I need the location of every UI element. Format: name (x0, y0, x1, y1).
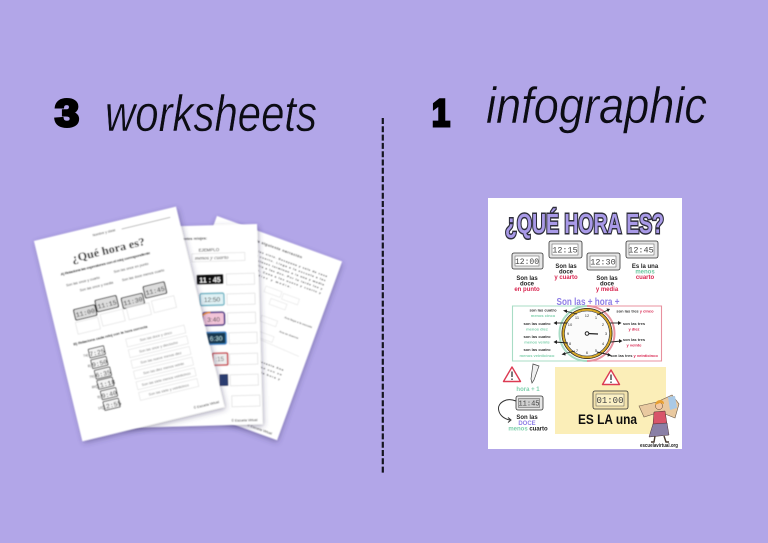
caption: son las doce menos cuarto: Son las (516, 415, 538, 421)
worksheet 3: reading page (back): juega hasta las seis. Cena a las nueve y cuarto y (216, 253, 322, 295)
worksheet 2: digital clocks page (middle): menos y cuarto (195, 255, 229, 262)
worksheet 1: ¿Qué hora es? page (front): 9:50 (91, 359, 108, 369)
yellow panel: es la una (555, 367, 666, 434)
infographic poster (488, 198, 682, 449)
worksheet 3: reading page (back): dibújala. (221, 362, 251, 376)
caption: son las doce menos cuarto: menos cuarto (508, 426, 548, 432)
worksheet 1: ¿Qué hora es? page (front): 11:00 (75, 308, 96, 319)
answer boxes row (75, 296, 177, 334)
worksheet 3: reading page (back): y come con su familia a las dos. Por la tarde lee y (218, 249, 323, 291)
worksheet 1: ¿Qué hora es? page (front): 7b) (89, 374, 95, 379)
worksheet 2: digital clocks page (middle): © Escuela Virtual (231, 418, 258, 423)
clock captions: cuarto (636, 275, 654, 281)
left labels: son las cuatro (529, 308, 557, 312)
worksheet 2: digital clocks page (middle) (116, 224, 263, 428)
worksheet 1: ¿Qué hora es? page (front): Son las nueve menos diez (140, 351, 182, 365)
worksheet 3: reading page (back): y a qué hora come con su (225, 352, 282, 377)
worksheet 1: ¿Qué hora es? page (front) (34, 207, 224, 441)
worksheet 1: ¿Qué hora es? page (front): © Escuela Virtual (193, 400, 220, 410)
analog clock: 3 (605, 331, 608, 336)
worksheet 3: reading page (back): ¿A qué hora se levanta Ana (226, 348, 284, 372)
left labels: son las cuatro (523, 334, 551, 339)
worksheet 2: digital clocks page (middle): 11 : 45 (199, 277, 221, 285)
analog clock (559, 306, 614, 361)
curved arrow (498, 400, 516, 422)
right labels: y diez (628, 326, 640, 332)
worksheet title: ¿Qué hora es? (70, 234, 146, 265)
clock captions: Son las (516, 276, 538, 282)
analog clock: 1 (595, 315, 598, 320)
caption: son las doce menos cuarto (508, 415, 548, 432)
left labels: menos veinticinco (520, 353, 555, 358)
yellow panel: es la una: 01:00 (596, 396, 624, 406)
dashed divider (382, 118, 384, 473)
left labels: son las cuatro (523, 321, 551, 326)
clock captions: doce (559, 270, 574, 276)
worksheet 1: ¿Qué hora es? page (front): 9:40 (101, 390, 118, 400)
clock captions: en punto (514, 287, 540, 293)
worksheet 2: digital clocks page (middle): 6:30 (210, 336, 223, 343)
clock 12:45 (626, 241, 658, 258)
worksheet 1: ¿Qué hora es? page (front): 9) (97, 395, 101, 399)
worksheet 2: digital clocks page (middle): :15 (215, 357, 225, 363)
clock captions: doce (600, 282, 615, 288)
worksheet 1: ¿Qué hora es? page (front): 11:15 (97, 299, 118, 311)
clock 12:15: 12:15 (552, 246, 578, 256)
worksheet 1: ¿Qué hora es? page (front): Nombre y clase (92, 228, 116, 238)
worksheet 1: ¿Qué hora es? page (front): 8) (87, 364, 91, 368)
character holding a map (639, 395, 679, 442)
clock captions: Son las (596, 276, 618, 282)
analog clock: 5 (595, 348, 598, 353)
number 1: 1 (432, 93, 450, 135)
analog clock: 2 (602, 322, 605, 327)
analog clock: 11 (575, 315, 580, 320)
clock 11:45 (516, 396, 543, 410)
right labels: son las tres (623, 337, 646, 342)
expressions: Son las once en punto (113, 262, 149, 274)
clock diagram panel (512, 306, 662, 361)
left labels: menos cinco (531, 313, 556, 318)
worksheet 3: reading page (back): © Escuela Virtual (247, 423, 273, 436)
worksheet 1: ¿Qué hora es? page (front): 11:45 (145, 286, 166, 297)
clock captions: doce (520, 282, 535, 288)
worksheet 3: reading page (back): a las ocho menos cuarto. Llega a la escuela a las (221, 241, 326, 282)
worksheet 1: ¿Qué hora es? page (front): 11:30 (123, 296, 143, 308)
number 3: 3 (55, 93, 79, 135)
clock 12:45: 12:45 (628, 246, 654, 256)
worksheet 2: digital clocks page (middle): diferentes relojes: (174, 236, 207, 241)
hora + 1 label: hora + 1 (516, 387, 540, 393)
subheading: Son las + hora + (556, 297, 620, 308)
heading: 3 worksheets (55, 85, 317, 142)
worksheet 3: reading page (back): Ana llega a la escuela (284, 315, 313, 329)
answer boxes (226, 273, 260, 407)
word infographic: infographic (486, 77, 707, 134)
worksheet 1: ¿Qué hora es? page (front): 12:55 (102, 400, 122, 411)
worksheet 3: reading page (back): Ana se duerme (279, 329, 299, 340)
coloured clocks (196, 274, 224, 285)
worksheet 1: ¿Qué hora es? page (front): 8b) (91, 384, 97, 389)
analog clock: 9 (567, 331, 570, 336)
clock 12:30: 12:30 (590, 258, 616, 268)
clock 12:30 (587, 253, 620, 270)
clock 01:00 (593, 391, 628, 409)
worksheet 1: ¿Qué hora es? page (front): Son las doce y cinco (139, 331, 172, 342)
right labels: son las tres y cinco (616, 308, 654, 314)
worksheet 3: reading page (back) (152, 216, 342, 440)
poster title: ¿QUÉ HORA ES? (505, 208, 664, 239)
clock captions: Son las (555, 264, 577, 270)
worksheet 1: ¿Qué hora es? page (front): Son las siete menos veinticinco (141, 371, 191, 387)
section B heading: B) Relaciona cada reloj con la hora correcta (73, 324, 149, 347)
section A heading: A) Relaciona las expresiones con el reloj correspondiente (60, 250, 151, 277)
worksheet 1: ¿Qué hora es? page (front): 11:18 (95, 379, 116, 390)
analog clock: 6 (586, 350, 589, 355)
clock captions: y media (596, 287, 619, 293)
analog clock: 12 (585, 313, 590, 318)
icon: pencil (531, 364, 539, 383)
right labels: son las tres (623, 321, 646, 326)
word worksheets: worksheets (105, 85, 317, 142)
caption: son las doce menos cuarto: DOCE (518, 421, 536, 427)
analog clock: 7 (576, 348, 579, 353)
worksheet 1: ¿Qué hora es? page (front): 7a) (83, 353, 89, 358)
worksheet 1: ¿Qué hora es? page (front): Son las diez menos veinte (143, 362, 184, 375)
clock captions: menos (635, 270, 655, 276)
worksheet 3: reading page (back): Ana se levanta a las siete. Desayuna y sale de casa (223, 237, 328, 278)
left labels: menos diez (526, 326, 548, 332)
four clock drawings (72, 282, 168, 320)
clock captions: Es la una (632, 264, 659, 270)
worksheet 3: reading page (back): familia? Escribe la hora y (223, 357, 281, 381)
analog clock: 10 (568, 322, 573, 327)
clock 11:45: 11:45 (518, 400, 540, 408)
website label: escuelavirtual.org (640, 443, 678, 449)
warning triangle left (504, 367, 520, 382)
worksheet 2: digital clocks page (middle): 3:40 (207, 317, 220, 324)
worksheet 3: reading page (back): se duerme a las diez y media. (215, 258, 292, 289)
expressions: Son las once y cuarto (66, 276, 100, 288)
right labels: y veinte (627, 342, 642, 348)
right labels (610, 308, 658, 358)
analog clock: 8 (569, 341, 572, 346)
clock captions (514, 264, 659, 293)
right labels: son las tres y veinticinco (610, 353, 658, 358)
worksheet 1: ¿Qué hora es? page (front): 10) (98, 405, 104, 411)
warning triangle (602, 370, 620, 384)
expressions: Son las once y media (79, 281, 114, 293)
text es la una: ES LA una (578, 411, 637, 427)
clock 12:15 (549, 241, 582, 258)
expressions: Son las doce menos cuarto (121, 268, 165, 282)
worksheet 1: ¿Qué hora es? page (front): Son las siete y veinticinco (148, 383, 189, 397)
worksheet 2: digital clocks page (middle): EJEMPLO (199, 247, 220, 253)
worksheet 1: ¿Qué hora es? page (front): 7:25 (89, 348, 106, 359)
left labels (520, 308, 557, 358)
option boxes (126, 325, 199, 400)
analog clock: 4 (602, 341, 605, 346)
heading: 1 infographic (432, 77, 707, 135)
digital times (88, 345, 120, 411)
worksheet 1: ¿Qué hora es? page (front): 6:35 (95, 369, 112, 380)
worksheet 1: ¿Qué hora es? page (front): Son las once y dieciocho (139, 341, 178, 354)
worksheet 3: reading page (back): ocho y cinco. Las clases terminan a la una y media (220, 245, 325, 287)
worksheet 3: reading page (back): Lee la siguiente narración (247, 236, 303, 260)
left labels: son las cuatro (523, 347, 551, 352)
arrows (555, 310, 621, 355)
clock captions: y cuarto (554, 275, 578, 281)
clock 12:00: 12:00 (515, 258, 539, 267)
left labels: menos veinte (524, 340, 551, 344)
expressions (65, 259, 165, 295)
clock 12:00 (512, 253, 543, 269)
worksheet 2: digital clocks page (middle): 12:50 (204, 297, 221, 304)
